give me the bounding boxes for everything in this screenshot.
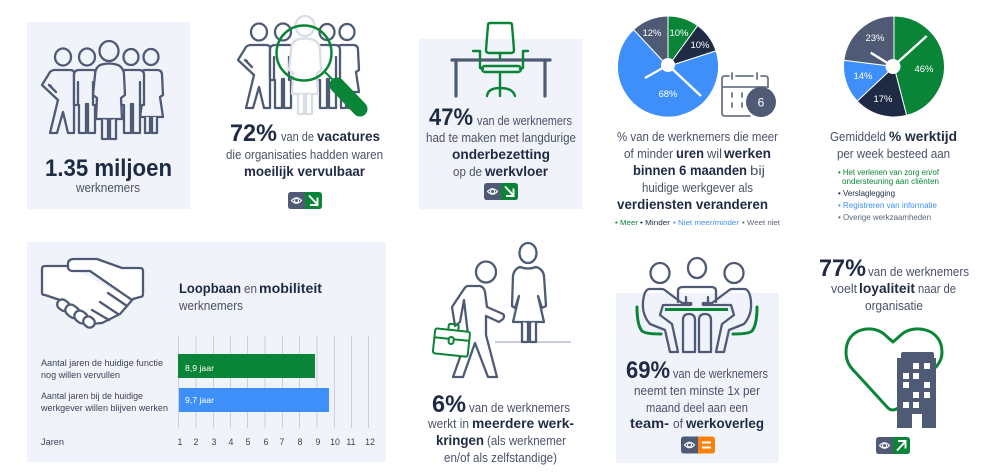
text: 47% van de werknemers: had te maken met langdurige [426, 131, 576, 145]
text: 69% van de werknemers: werkoverleg [685, 416, 764, 431]
text: % van de werknemers: huidige werkgever als [642, 181, 753, 195]
text: gemiddeld % werktijd: Gemiddeld [830, 130, 886, 144]
heading: loopbaan en mobiliteit: werknemers [178, 299, 243, 313]
panel: 69% team- of werkoverleg [616, 258, 779, 463]
pie chart: meer, minder, niet meer/minder, weet niet: 68% [658, 89, 678, 100]
panel: 6% meerdere werkkringen [427, 243, 574, 465]
pie chart: meer, minder, niet meer/minder, weet niet [617, 16, 718, 117]
text: gemiddeld % werktijd: % werktijd [889, 128, 957, 144]
bar chart: jaren: 12 [365, 437, 375, 447]
bar chart: jaren: werkgever willen blijven werken [40, 403, 168, 413]
text: 47% van de werknemers: van de werknemers [477, 114, 572, 128]
text: % van de werknemers: of minder [624, 147, 673, 161]
text: 47% van de werknemers: 47% [429, 104, 473, 131]
pie chart: % werktijd: 17% [873, 94, 893, 105]
text: 77% van de werknemers: loyaliteit [859, 281, 916, 296]
text: 6% van de werknemers: werkt in [427, 417, 469, 431]
text: 77% van de werknemers: organisatie [865, 299, 923, 313]
text: 72% van de vacatures: moeilijk vervulbaar [244, 164, 366, 179]
text: 77% van de werknemers: 77% [819, 255, 866, 282]
badge: eye with equals sign [681, 436, 715, 454]
panel: 1.35 miljoen werknemers [27, 22, 190, 209]
icon: desk and chair [452, 23, 550, 96]
text: 47% van de werknemers: werkvloer [484, 164, 549, 179]
label: werknemers: werknemers [75, 181, 140, 195]
icon: walking man with briefcase and woman [433, 243, 571, 377]
text: 6% van de werknemers [427, 391, 574, 465]
bar chart: jaren [40, 336, 375, 447]
bar chart: jaren: 2 [194, 437, 199, 447]
legend: • Minder [640, 218, 671, 227]
icon: people under magnifier [238, 16, 360, 114]
text: 69% van de werknemers: 69% [626, 357, 670, 384]
panel: loopbaan en mobiliteit [27, 242, 386, 462]
text: gemiddeld % werktijd [830, 128, 957, 161]
bar chart: jaren: Jaren [41, 437, 64, 447]
panel: urenverandering pie [615, 16, 781, 227]
text: % van de werknemers: verdiensten veranderen [617, 197, 768, 212]
text: 69% van de werknemers: team- [630, 416, 669, 431]
bar chart: jaren: 8 [298, 437, 303, 447]
pie chart: % werktijd: 23% [865, 33, 885, 44]
badge: eye with down arrow [484, 183, 518, 200]
bar chart: jaren: 9 [316, 437, 321, 447]
pie chart: meer, minder, niet meer/minder, weet niet: 10% [669, 28, 689, 39]
legend: • Verslaglegging [838, 189, 895, 198]
text: 69% van de werknemers: neemt ten minste 1x per [634, 384, 760, 398]
heading: loopbaan en mobiliteit: Loopbaan [179, 280, 241, 296]
text: 6% van de werknemers: (als werknemer [487, 434, 566, 448]
icon: heart and office building [846, 329, 942, 428]
text: 77% van de werknemers: van de werknemers [868, 265, 969, 279]
bar chart: jaren: 4 [229, 437, 234, 447]
bar chart: jaren: Aantal jaren bij de huidige [41, 391, 143, 401]
bar chart: jaren: 3 [212, 437, 217, 447]
text: 69% van de werknemers: maand deel aan een [646, 401, 748, 415]
panel: 72% vacatures [226, 16, 383, 209]
text: 6% van de werknemers: van de werknemers [469, 401, 570, 415]
icon: three people at a table [637, 258, 757, 352]
legend: • Het verlenen van zorg en/of [838, 168, 940, 177]
legend: • Niet meer/minder [673, 218, 740, 227]
badge: eye with down arrow [288, 192, 322, 209]
icon: handshake [42, 259, 143, 330]
text: 47% van de werknemers: onderbezetting [452, 147, 550, 162]
text: 6% van de werknemers: kringen [436, 433, 484, 448]
badge: eye with up arrow [876, 437, 910, 454]
text: 69% van de werknemers: of [673, 417, 683, 431]
pie chart: % werktijd: 46% [914, 64, 934, 75]
text: % van de werknemers [617, 130, 778, 212]
legend [615, 218, 781, 227]
text: 72% van de vacatures: van de [281, 130, 314, 144]
text: % van de werknemers: bij [750, 164, 765, 178]
bar chart: jaren: 7 [280, 437, 285, 447]
bar chart: jaren: 10 [330, 437, 340, 447]
text: 72% van de vacatures [226, 120, 383, 179]
icon: calendar with 6: 6 [758, 96, 765, 110]
legend: ondersteuning aan cliënten [842, 177, 939, 186]
panel: 47% onderbezetting [419, 23, 582, 209]
legend: • Meer [615, 218, 639, 227]
text: 47% van de werknemers [426, 104, 576, 179]
heading: loopbaan en mobiliteit: mobiliteit [259, 280, 322, 296]
text: 72% van de vacatures: die organisaties hadden waren [226, 148, 383, 162]
legend [838, 168, 940, 222]
bar chart: jaren: 6 [264, 437, 269, 447]
pie chart: meer, minder, niet meer/minder, weet niet: 10% [690, 40, 710, 51]
text: gemiddeld % werktijd: per week besteed aan [837, 147, 950, 161]
panel: werktijd pie [830, 16, 957, 222]
legend: • Registreren van informatie [838, 201, 937, 210]
icon: group of people [42, 41, 163, 139]
text: 72% van de vacatures: 72% [230, 120, 277, 147]
pie chart: % werktijd: 14% [853, 71, 873, 82]
bar chart: jaren: 11 [346, 437, 356, 447]
text: 47% van de werknemers: op de [453, 165, 482, 179]
text: 6% van de werknemers: meerdere werk- [472, 416, 574, 431]
bar chart: jaren: nog willen vervullen [41, 370, 120, 380]
text: % van de werknemers: werken [723, 146, 771, 161]
legend: • Weet niet [742, 218, 781, 227]
heading: loopbaan en mobiliteit [178, 280, 322, 313]
text: 72% van de vacatures: vacatures [317, 129, 380, 144]
text: % van de werknemers: binnen 6 maanden [633, 163, 747, 178]
text: % van de werknemers: uren [676, 146, 704, 161]
text: 6% van de werknemers: 6% [432, 391, 466, 418]
text: 6% van de werknemers: en/of als zelfstandige) [444, 451, 557, 465]
pie chart: meer, minder, niet meer/minder, weet niet: 12% [642, 28, 662, 39]
text: 77% van de werknemers [819, 255, 969, 313]
text: % van de werknemers: % van de werknemers die meer [617, 130, 778, 144]
pie chart: % werktijd [844, 16, 944, 117]
bar chart: jaren: 9,7 jaar [185, 395, 214, 405]
heading: loopbaan en mobiliteit: en [244, 282, 257, 296]
text: 69% van de werknemers: van de werknemers [673, 367, 768, 381]
icon: calendar with 6 [722, 73, 776, 117]
bar chart: jaren: Aantal jaren de huidige functie [41, 358, 163, 368]
bar chart: jaren: 8,9 jaar [185, 363, 214, 373]
panel: 77% loyaliteit [819, 255, 969, 454]
headline: 1.35 miljoen: 1.35 miljoen [45, 155, 172, 182]
bar chart: jaren: 5 [246, 437, 251, 447]
legend: • Overige werkzaamheden [838, 213, 931, 222]
bar chart: jaren: 1 [178, 437, 183, 447]
text: 69% van de werknemers [626, 357, 768, 431]
text: % van de werknemers: wil [706, 147, 722, 161]
text: 77% van de werknemers: voelt [831, 282, 858, 296]
text: 77% van de werknemers: naar de [918, 282, 956, 296]
